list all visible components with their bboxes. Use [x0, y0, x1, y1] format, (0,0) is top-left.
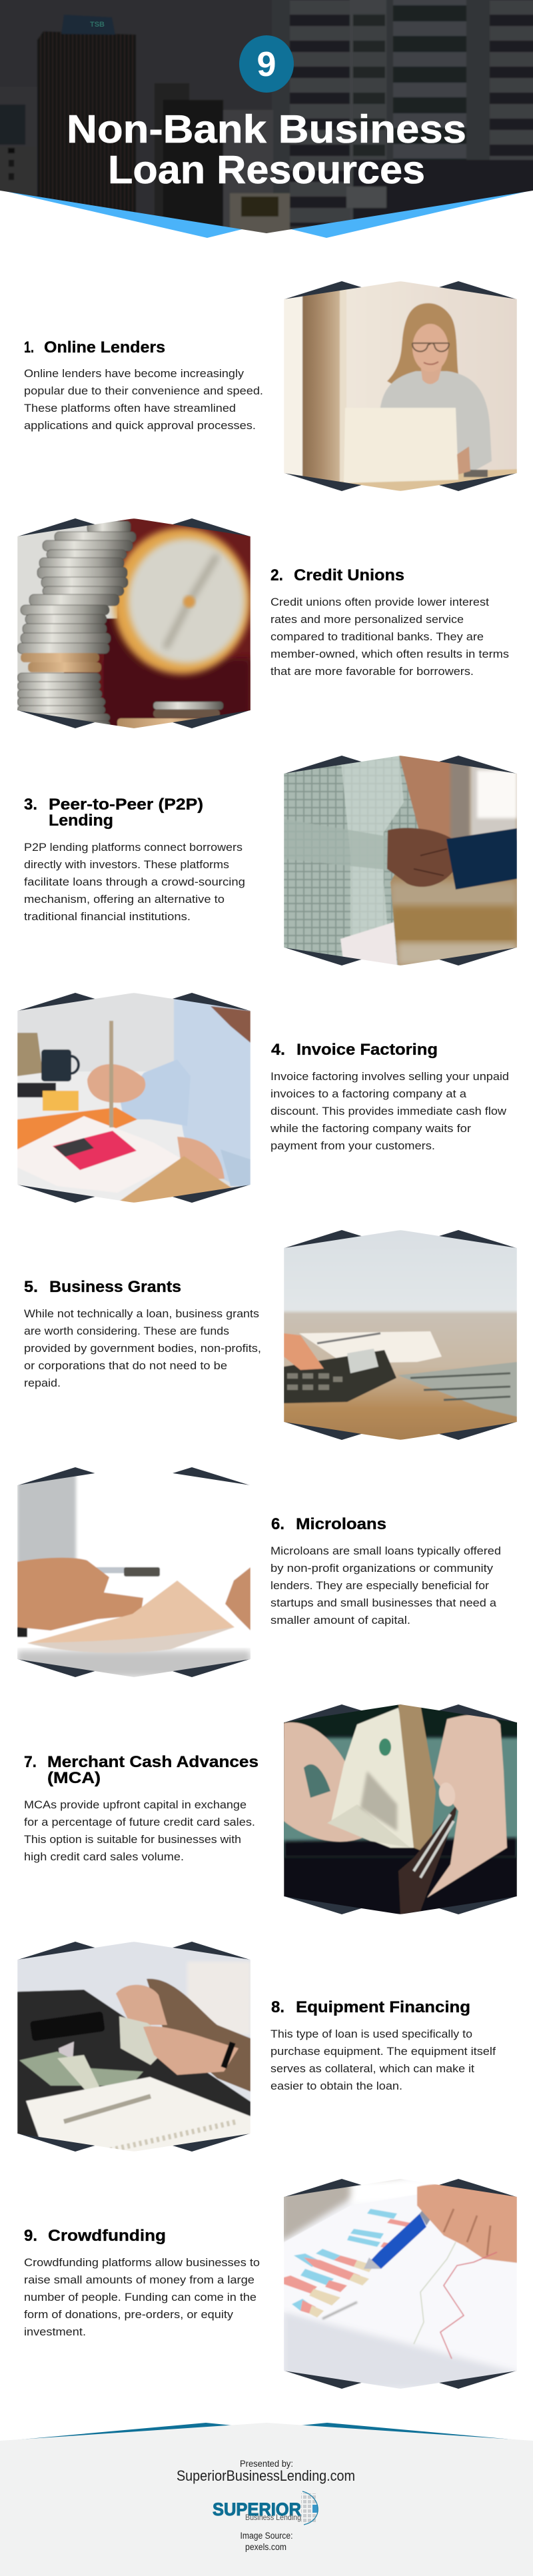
body text: provided by government bodies, non-profits, — [24, 1343, 261, 1355]
photo: counting cash over notebook — [17, 1942, 251, 2152]
body text: serves as collateral, which can make it — [270, 2063, 474, 2075]
photo: hands passing pen and document — [17, 1467, 251, 1677]
body text: Invoice factoring involves selling your unpaid — [270, 1071, 509, 1083]
title — [67, 107, 466, 192]
panel: 3 Peer-to-Peer Lending — [24, 756, 517, 966]
header accent chevrons — [5, 191, 528, 238]
panel: 8 Equipment Financing — [17, 1942, 496, 2152]
body text: P2P lending platforms connect borrowers — [24, 842, 243, 854]
footer credits: SuperiorBusinessLending.com — [177, 2467, 355, 2484]
panel: 1 Online Lenders — [24, 281, 517, 491]
body text: member-owned, which often results in terms — [270, 648, 509, 660]
body text: high credit card sales volume. — [24, 1851, 184, 1863]
header photo background: city buildings — [0, 0, 533, 240]
panel: 2 Credit Unions — [17, 518, 509, 728]
panel: 5 Business Grants — [24, 1230, 517, 1440]
panel: 9 Crowdfunding — [24, 2176, 517, 2389]
body text: purchase equipment. The equipment itself — [270, 2046, 496, 2058]
footer panel — [0, 2423, 533, 2576]
body text: popular due to their convenience and speed. — [24, 385, 263, 397]
panel: 6 Microloans — [17, 1467, 501, 1677]
body text: by non-profit organizations or community — [270, 1563, 494, 1575]
heading: 4. — [271, 1041, 285, 1059]
body text: raise small amounts of money from a large — [24, 2274, 255, 2286]
body text: Credit unions often provide lower interest — [270, 596, 489, 608]
body text: directly with investors. These platforms — [24, 859, 229, 871]
body text — [24, 1799, 255, 1863]
body text: form of donations, pre-orders, or equity — [24, 2309, 234, 2321]
heading: Microloans — [296, 1515, 386, 1533]
title: Loan Resources — [108, 148, 425, 192]
body text: discount. This provides immediate cash flow — [270, 1105, 506, 1117]
body text: easier to obtain the loan. — [270, 2080, 402, 2092]
heading: Invoice Factoring — [296, 1041, 438, 1059]
body text — [270, 2028, 496, 2092]
body text: for a percentage of future credit card sales. — [24, 1816, 255, 1828]
body text: smaller amount of capital. — [270, 1614, 410, 1626]
photo: open wallet with cash — [280, 1701, 520, 1914]
logo: Superior Business Lending — [213, 2491, 318, 2525]
number badge: 9 — [257, 45, 276, 84]
body text — [24, 368, 263, 432]
body text — [270, 596, 509, 678]
body text: payment from your customers. — [270, 1140, 435, 1152]
body text — [24, 2257, 260, 2338]
body text — [270, 1545, 501, 1626]
body text: Online lenders have become increasingly — [24, 368, 245, 380]
body text: These platforms often have streamlined — [24, 402, 236, 414]
photo: woman at laptop — [284, 281, 517, 491]
heading: Business Grants — [49, 1278, 181, 1296]
heading — [24, 796, 203, 830]
heading — [24, 1753, 259, 1787]
heading: 2. — [270, 566, 283, 584]
body text — [24, 1308, 261, 1389]
heading: Credit Unions — [294, 566, 404, 584]
body text: rates and more personalized service — [270, 614, 464, 626]
body text: Crowdfunding platforms allow businesses to — [24, 2257, 260, 2269]
body text: or corporations that do not need to be — [24, 1360, 227, 1372]
photo: calculator and papers — [17, 993, 251, 1203]
heading: 6. — [271, 1515, 284, 1533]
image source credit — [240, 2531, 293, 2552]
body text — [24, 842, 245, 923]
body text: applications and quick approval processes. — [24, 420, 256, 432]
body text — [270, 1071, 509, 1152]
title: Non-Bank Business — [67, 107, 466, 151]
heading: Peer-to-Peer (P2P) — [49, 796, 203, 814]
heading: Online Lenders — [44, 338, 165, 356]
heading: (MCA) — [47, 1769, 101, 1787]
body text: startups and small businesses that need a — [270, 1597, 497, 1609]
heading: 1. — [24, 338, 34, 356]
photo: handshake — [284, 756, 517, 966]
photo: hand with pen over charts — [280, 2176, 517, 2389]
number badge — [239, 35, 294, 93]
logo: Superior Business Lending: Business Lending — [245, 2514, 301, 2522]
image source credit: Image Source: — [240, 2531, 293, 2541]
footer credits — [177, 2459, 355, 2484]
body text: compared to traditional banks. They are — [270, 631, 484, 643]
body text: mechanism, offering an alternative to — [24, 894, 225, 906]
body text: lenders. They are especially beneficial for — [270, 1580, 490, 1592]
body text: repaid. — [24, 1377, 61, 1389]
body text: that are more favorable for borrowers. — [270, 666, 474, 678]
body text: while the factoring company waits for — [270, 1123, 472, 1135]
body text: traditional financial institutions. — [24, 911, 191, 923]
panel: 4 Invoice Factoring — [17, 993, 509, 1203]
heading: Crowdfunding — [48, 2227, 166, 2245]
heading: 8. — [271, 1998, 284, 2016]
body text: are worth considering. These are funds — [24, 1325, 229, 1337]
TSB sign on building: TSB — [90, 21, 105, 29]
body text: This type of loan is used specifically to — [270, 2028, 472, 2040]
heading: 7. — [24, 1753, 37, 1771]
body text: MCAs provide upfront capital in exchange — [24, 1799, 247, 1811]
heading: 9. — [24, 2227, 37, 2245]
heading: Equipment Financing — [296, 1998, 470, 2016]
body text: While not technically a loan, business grants — [24, 1308, 259, 1320]
panel: 7 Merchant Cash Advances — [24, 1701, 520, 1914]
heading: 5. — [24, 1278, 38, 1296]
body text: invoices to a factoring company at a — [270, 1088, 467, 1100]
footer accents — [7, 2423, 526, 2441]
photo: coins and clock — [17, 518, 251, 728]
logo: Superior Business Lending: SUPERIOR — [213, 2499, 301, 2519]
photo: calculator on desk — [284, 1230, 517, 1440]
body text: facilitate loans through a crowd-sourcing — [24, 876, 245, 888]
body text: investment. — [24, 2326, 86, 2338]
body text: Microloans are small loans typically offered — [270, 1545, 501, 1557]
body text: This option is suitable for businesses with — [24, 1834, 241, 1846]
footer credits: Presented by: — [240, 2459, 293, 2469]
image source credit: pexels.com — [245, 2542, 286, 2552]
heading: 3. — [24, 796, 37, 814]
heading: Merchant Cash Advances — [47, 1753, 259, 1771]
body text: number of people. Funding can come in the — [24, 2291, 257, 2303]
heading: Lending — [49, 812, 113, 830]
